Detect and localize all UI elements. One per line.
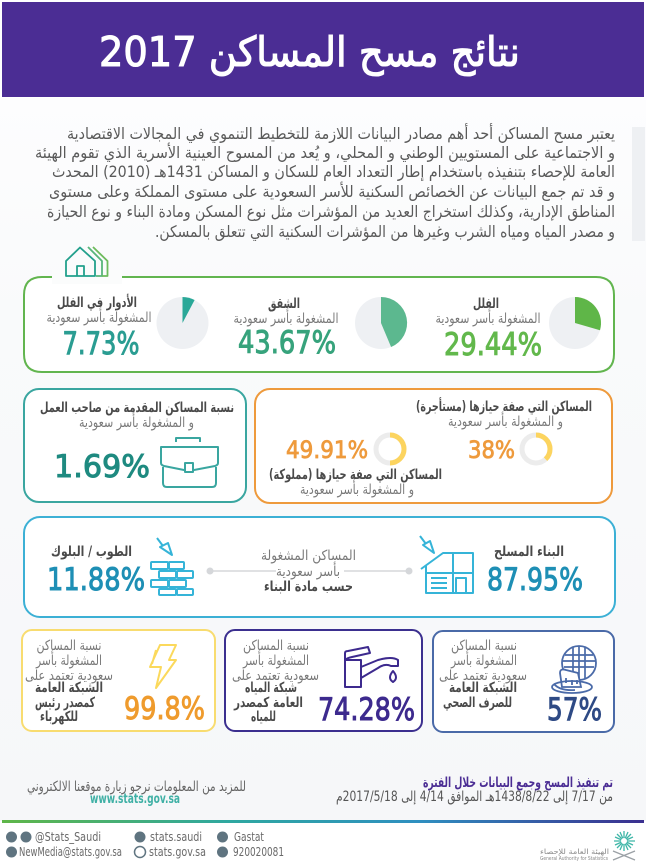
panel: sewage: للصرف الصحي [443, 695, 512, 711]
logo: General Authority for Statistics [540, 831, 635, 862]
label: villa floors: المشغولة بأسر سعودية [46, 307, 152, 326]
panel: water: للمياه [251, 709, 276, 725]
website note: للمزيد من المعلومات نرجو زيارة موقعنا الالكتروني [27, 779, 246, 795]
panel: building material: البناء المسلح [494, 544, 564, 560]
social contacts: @Stats_Saudi [35, 829, 101, 844]
title banner [2, 2, 644, 97]
label: building material [261, 548, 356, 595]
panel: electricity: سعودية تعتمد على [25, 668, 113, 684]
icon: faucet [345, 647, 398, 687]
panel: water [225, 630, 422, 731]
social contacts [6, 829, 284, 859]
label: villas: 29.44% [444, 327, 542, 363]
panel: electricity: المشغولة بأسر [35, 650, 102, 669]
label: building material: المساكن المشغولة [261, 548, 356, 564]
logo: General Authority for Statistics: الهيئة العامة للإحصاء [540, 848, 609, 856]
panel: tenure: 38% [468, 436, 515, 464]
label: villas: الفلل [473, 296, 499, 312]
survey period note [336, 775, 613, 805]
panel: tenure: و المشغولة بأسر سعودية [448, 411, 563, 430]
panel: sewage: المشغولة بأسر [450, 650, 517, 669]
label: apartments: الشقق [268, 296, 300, 312]
panel: water: شبكة المياه [245, 680, 297, 696]
pie: apartments [355, 297, 407, 349]
icon: reinforced building [420, 536, 473, 593]
panel: sewage: الشبكة العامة [449, 680, 517, 696]
panel: electricity: الشبكة العامة [35, 680, 103, 696]
label: villa floors: الأدوار في الفلل [57, 294, 137, 311]
pie: villas [549, 297, 601, 349]
panel: employer provided: و المشغولة بأسر سعودية [79, 412, 194, 431]
panel: water: 74.28% [318, 692, 415, 728]
panel: building material: الطوب / البلوك [51, 544, 132, 560]
panel: sewage [433, 631, 614, 732]
label: villa floors [46, 294, 152, 362]
panel: tenure: المساكن التي صفة حيازها (مملوكة) [269, 467, 442, 483]
side accent bar [632, 127, 645, 241]
website note [27, 779, 246, 807]
panel: water: المشغولة بأسر [242, 650, 309, 669]
icon: houses [66, 247, 108, 276]
panel: electricity: للكهرباء [40, 709, 78, 725]
social contacts: NewMedia@stats.gov.sa [19, 844, 122, 859]
label: villa floors: 7.73% [62, 326, 140, 362]
panel: electricity: نسبة المساكن [36, 638, 102, 654]
panel: employer provided: نسبة المساكن المقدمة من صاحب العمل [40, 400, 234, 416]
panel: sewage: سعودية تعتمد على [439, 668, 527, 684]
website note: www.stats.gov.sa [90, 792, 180, 807]
label: building material: بأسر سعودية [276, 561, 340, 580]
icon: bricks [151, 538, 193, 595]
panel: electricity: كمصدر رئيس [35, 695, 96, 711]
panel: electricity: 99.8% [124, 691, 205, 727]
footer gradient line [2, 820, 644, 823]
panel: water: سعودية تعتمد على [232, 668, 319, 684]
social contacts: stats.saudi [150, 829, 202, 844]
panel: employer provided: 1.69% [54, 449, 150, 485]
pie: villa floors [156, 297, 208, 349]
panel: dwelling types [24, 247, 614, 372]
connector line [206, 568, 412, 574]
label: apartments: المشغولة بأسر سعودية [234, 308, 338, 327]
panel: sewage: 57% [547, 692, 602, 728]
label: villas: المشغولة بأسر سعودية [436, 308, 540, 327]
icon: sewer grate [552, 646, 596, 693]
panel: building material: 11.88% [47, 562, 145, 598]
label: apartments: 43.67% [238, 325, 336, 361]
survey period note: من 7/17 إلى 1438/8/22هـ الموافق 4/14 إلى 2017/5/18م [336, 789, 613, 805]
panel: sewage: نسبة المساكن [451, 638, 517, 654]
panel: water: نسبة المساكن [243, 638, 309, 654]
label: apartments [234, 296, 338, 361]
title: نتائج مسح المساكن 2017 [99, 28, 520, 76]
label: villas [436, 296, 542, 363]
icon: lightning bolt [150, 645, 176, 688]
donut: rented [522, 435, 550, 463]
panel: tenure [255, 389, 612, 503]
intro paragraph [35, 123, 615, 242]
label: building material: حسب مادة البناء [264, 579, 353, 595]
panel: tenure: 49.91% [286, 436, 368, 464]
panel: electricity [22, 630, 215, 731]
social contacts: stats.gov.sa [149, 844, 206, 859]
panel: water: العامة كمصدر [233, 695, 303, 711]
panel: building material: 87.95% [487, 562, 583, 598]
social contacts: 920020081 [233, 844, 284, 859]
panel: tenure: و المشغولة بأسر سعودية [300, 479, 414, 498]
logo: General Authority for Statistics: General Authority for Statistics [540, 856, 608, 862]
panel: building material [24, 517, 615, 617]
icon: briefcase [161, 438, 218, 487]
panel: employer provided [24, 389, 246, 502]
donut: owned [376, 435, 404, 463]
social contacts: Gastat [234, 829, 264, 844]
